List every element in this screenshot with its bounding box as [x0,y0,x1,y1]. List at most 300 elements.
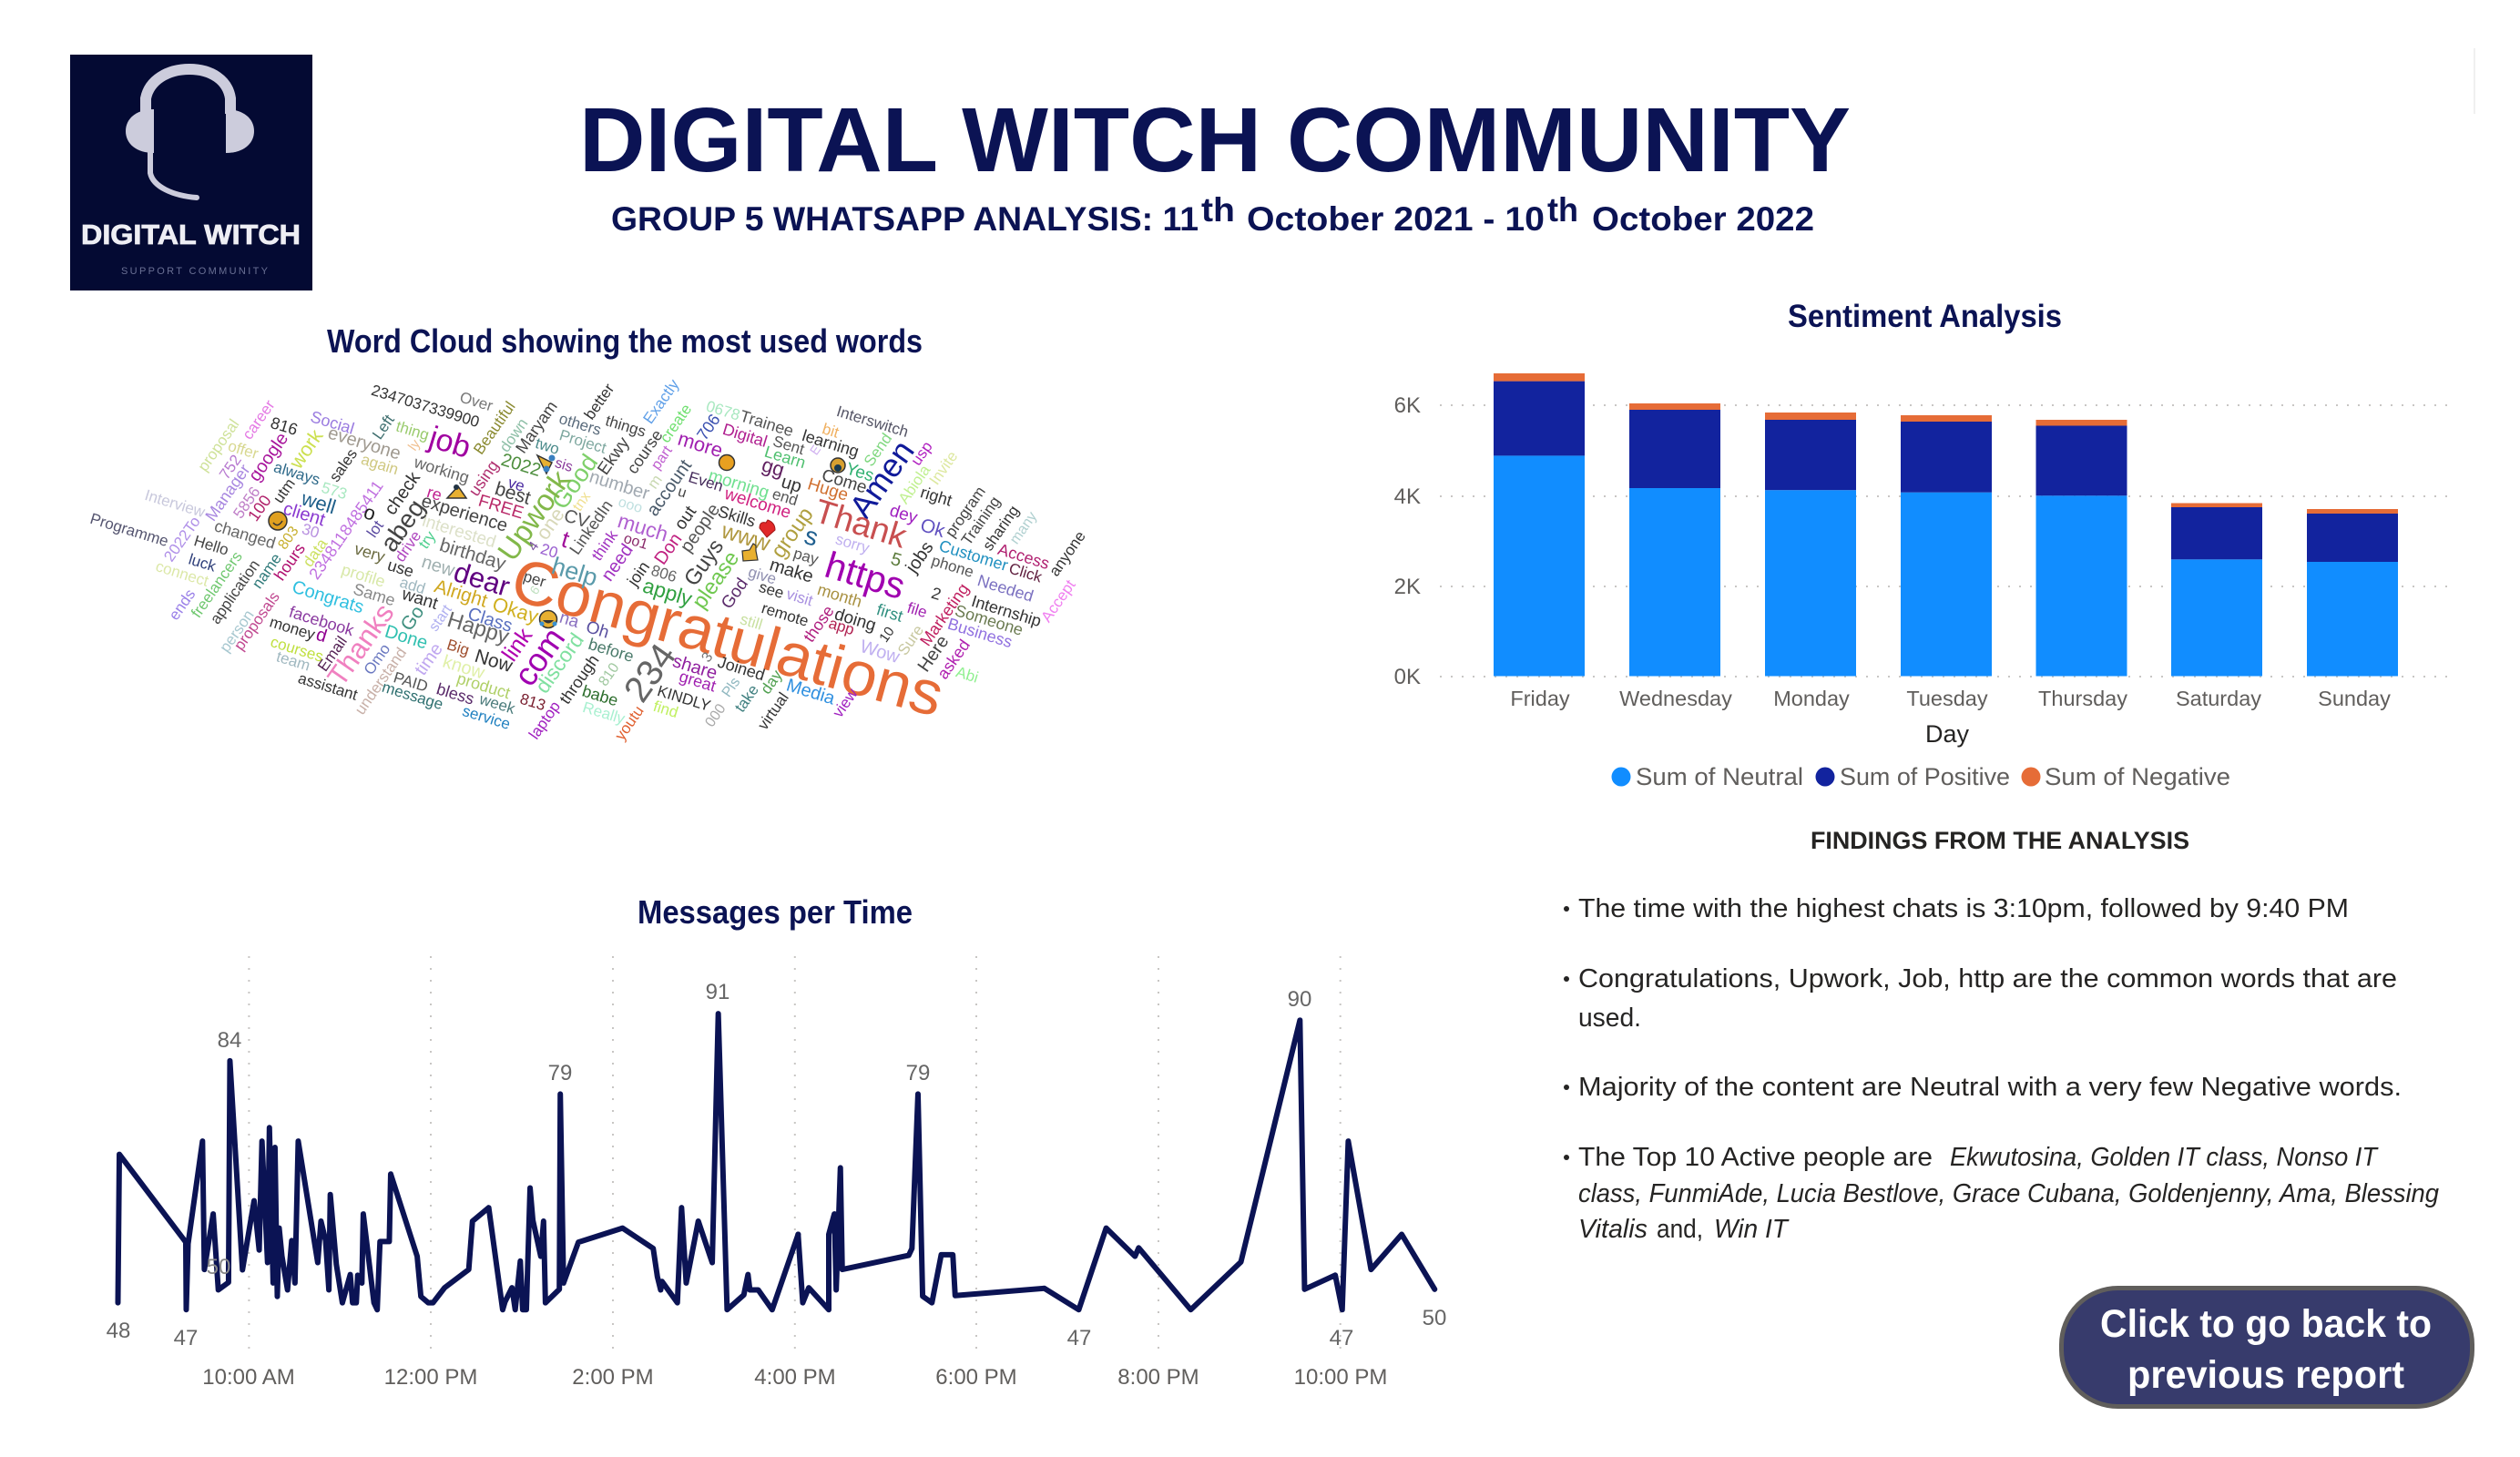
word cloud: need [597,540,638,586]
word cloud: Learn [762,443,808,472]
word cloud: 4 [525,539,542,554]
finding: common words [1564,964,2397,1033]
word cloud: 573 [320,479,349,503]
word cloud: 0678 [704,397,742,424]
word cloud: course [623,426,667,477]
word cloud: people [677,500,724,556]
word cloud: Omo [361,640,393,678]
word cloud: Email [314,633,351,675]
word cloud: Left [369,412,398,443]
data labels: 50 [207,1255,230,1279]
word cloud: bit [821,420,842,442]
word cloud: God [718,575,752,613]
word cloud: gg [760,453,787,482]
word cloud: na [557,608,582,632]
word cloud: 810 [596,660,623,689]
word cloud: Come [820,466,869,497]
word cloud: share [670,651,719,684]
word cloud: using [464,457,503,499]
day axis labels: Saturday [2176,687,2261,710]
word cloud: Programme [88,510,170,550]
word cloud: dey [887,501,920,528]
icon: laughing emoji [539,610,557,628]
bar: Saturday [2171,503,2262,676]
word cloud: Class [465,604,515,637]
word cloud: Maryam [512,398,561,456]
word cloud: 5 [888,549,904,571]
word cloud: 2348118485411 [305,477,387,583]
finding: sentiment majority: Majority of the content are Neutral with a very few Negative words. [1578,1073,2402,1102]
word cloud: many [1007,509,1040,547]
word cloud: o [361,500,379,525]
heading: messages per time: Messages per Time [638,893,913,931]
word cloud: working [411,453,472,487]
word cloud: number [587,467,652,504]
word cloud: Accept [1037,576,1079,626]
word cloud: Skills [716,502,758,531]
word cloud: join [623,558,653,590]
icon: dark emoji [831,458,845,473]
word cloud: apply [640,574,696,611]
word cloud: 10 [876,624,898,646]
data labels: 79 [548,1061,572,1085]
axis title: day: Day [1925,720,1970,748]
word cloud: Yes [843,459,876,486]
word cloud: re [424,483,444,504]
word cloud: through [556,651,603,708]
day axis labels: Thursday [2038,687,2127,710]
word cloud: proposal [195,416,242,474]
word cloud: Abiola [895,462,934,507]
word cloud: profile [340,560,387,591]
button: back to previous report: previous report [2127,1353,2404,1397]
word cloud: visit [784,586,815,609]
word cloud: very [352,539,387,566]
word cloud: group [766,503,819,563]
data labels: 48 [107,1319,130,1343]
word cloud: anyone [1046,528,1089,579]
word cloud: youtu [611,703,648,743]
word cloud: check [381,467,425,519]
word cloud: know [440,652,487,684]
word cloud: facebook [287,603,357,640]
word cloud: 000 [702,701,729,730]
word cloud: assistant [296,669,360,704]
word cloud: s [801,521,821,552]
word cloud: com [506,620,572,693]
word cloud: application [207,556,263,627]
bar: Sunday [2307,509,2398,676]
word cloud: per [521,567,548,591]
word cloud: u [676,484,689,501]
word cloud: 803 [275,524,302,553]
day axis labels: Wednesday [1619,687,1732,710]
word cloud: utm [270,475,299,506]
word cloud: PAID [392,668,430,696]
word cloud: before [587,635,636,666]
icon: heart emoji [760,520,775,537]
word cloud: Internship [969,592,1044,630]
word cloud: view [829,685,862,720]
word cloud [88,376,1089,743]
word cloud: link [497,623,538,666]
word cloud: Marketing [916,580,973,649]
data labels: 84 [218,1028,241,1053]
time axis labels: 8:00 PM [1117,1365,1199,1390]
word cloud: doing [832,605,878,636]
word cloud: babe [580,682,620,709]
word cloud: Abi [954,663,981,687]
word cloud: FREE [476,492,525,523]
word cloud: out [671,503,701,534]
logo: digital witch headset [70,55,312,290]
stacked bar chart: sentiment by day: 0K [1394,665,1421,689]
day axis labels: Tuesday [1906,687,1988,710]
word cloud: data [300,535,332,570]
word cloud: jobs [902,538,938,577]
word cloud: discord [530,628,588,698]
bar: Friday [1494,373,1585,676]
word cloud: Really [581,698,627,728]
data labels: 47 [1067,1326,1091,1350]
word cloud: t [558,525,574,554]
word cloud: use [385,555,416,581]
day axis labels: Friday [1510,687,1570,710]
word cloud: great [677,667,719,696]
finding: top 10 people: and, [1657,1215,1703,1244]
word cloud: account [643,456,696,520]
word cloud: 706 [693,411,724,443]
word cloud: ends [166,586,199,624]
word cloud: Manager [201,461,254,525]
word cloud: Huge [805,474,851,505]
word cloud: d [313,625,330,647]
word cloud: much [615,508,671,546]
word cloud: sis [553,455,575,475]
word cloud: sharing [979,503,1023,554]
subtitle: October 2021 - 10 [1247,200,1545,238]
word cloud: those [800,602,838,646]
word cloud: phone [930,552,975,581]
word cloud: Access [995,540,1052,573]
time axis labels: 10:00 AM [202,1365,295,1390]
word cloud: Happy [444,607,512,649]
word cloud: start [426,602,455,635]
word cloud: message [380,678,445,713]
word cloud: Amen [842,433,922,525]
word cloud: ve [506,474,526,495]
stacked bar chart: sentiment by day: 2K [1394,575,1421,599]
word cloud: product [454,669,513,702]
word cloud: file [905,599,929,621]
day axis labels: Monday [1773,687,1850,710]
word cloud: Joined [716,653,767,684]
data labels: 91 [706,980,729,1004]
word cloud: Exactly [640,376,683,427]
word cloud: two [534,434,561,458]
finding: peak chat times: The time with the highest chats is 3:10pm, followed by 9:40 PM [1578,894,2349,923]
word cloud: Beautiful [470,398,519,458]
word cloud: Social [309,407,356,438]
word cloud: day [757,667,786,698]
word cloud: changed [212,516,278,553]
word cloud: Congrats [290,577,366,617]
word cloud: Good [546,449,603,515]
icon: thumbs up emoji [742,544,758,561]
word cloud: ly [405,436,423,453]
word cloud: 2022 [499,450,543,481]
word cloud: learning [800,426,862,461]
word cloud: 3 [699,649,717,666]
word cloud: 752 [216,452,245,483]
data labels: 47 [1330,1326,1353,1350]
word cloud: Customer [937,536,1010,575]
word cloud: bless [434,679,476,708]
word cloud: 2347037339900 [369,382,482,431]
findings list [1564,894,2439,1244]
bar: Tuesday [1901,415,1992,676]
heading: word cloud: Word Cloud showing the most used words [327,322,923,360]
finding: common words: used. [1578,1004,1641,1033]
word cloud: things [604,412,648,441]
word cloud: 806 [649,562,678,586]
word cloud: always [271,458,322,489]
word cloud: proposals [230,588,283,654]
title: DIGITAL WITCH COMMUNITY [579,89,1851,191]
word cloud: laptop [525,698,564,742]
word cloud: job [424,420,474,465]
word cloud: try [415,527,439,552]
word cloud: career [239,397,279,443]
word cloud: remote [760,599,811,630]
word cloud: 813 [518,690,547,714]
icon: fist emoji [719,455,734,470]
legend: Sum of Negative [2045,763,2230,790]
word cloud: add [398,574,427,597]
word cloud: 100 [244,492,275,525]
word cloud: sorry [833,530,872,557]
legend [1612,763,2230,790]
line series [117,1014,1434,1309]
word cloud: work [284,424,328,474]
word cloud: lot [363,517,387,541]
word cloud: LinkedIn [566,496,617,558]
word cloud: offer [226,437,260,463]
word cloud: see [757,578,786,602]
data labels: 47 [174,1326,198,1350]
word cloud: Someone [953,601,1025,639]
word cloud: courses [269,633,325,666]
word cloud: Sent [770,433,807,458]
word cloud: Interswitch [834,402,911,441]
word cloud: sales [326,445,361,485]
word cloud: Ekwy [594,433,634,479]
word cloud: well [298,486,339,518]
logo: digital witch headset: SUPPORT COMMUNITY [121,266,269,277]
legend: Sum of Neutral [1636,763,1803,790]
time axis labels: 4:00 PM [754,1365,836,1390]
stacked bar chart: sentiment by day [1394,373,2455,748]
finding: top 10 people: Vitalis [1578,1215,1648,1244]
word cloud: ooo [617,494,644,516]
bar: Wednesday [1629,403,1720,676]
time axis labels: 10:00 PM [1294,1365,1387,1390]
word cloud: right [918,483,954,510]
finding: top 10 people: The Top 10 Active people are [1578,1143,1933,1172]
word cloud: app [827,615,856,638]
word cloud: Training [958,494,1004,548]
word cloud: Send [861,430,895,470]
word cloud: hours [270,540,309,584]
word cloud: money [268,613,318,644]
data labels: 50 [1423,1306,1446,1330]
word cloud: luck [187,550,219,576]
word cloud: new [419,552,457,581]
word cloud: make [767,555,816,587]
word cloud: again [359,451,401,478]
finding: top 10 people [1564,1143,2439,1244]
word cloud: 816 [269,413,300,439]
word cloud: create [657,401,695,446]
finding: top 10 people: class, FunmiAde, Lucia Bestlove, Grace Cubana, Goldenjenny, Ama, Blessing [1578,1179,2439,1208]
legend: Sum of Positive [1840,763,2010,790]
word cloud: CV [561,505,592,533]
word cloud: first [874,600,905,626]
word cloud: interested [420,512,498,552]
bar: Monday [1765,413,1856,676]
word cloud: still [738,610,765,634]
word cloud: abeg [374,494,431,556]
word cloud: Guys [679,535,729,591]
word cloud: dear [450,555,514,603]
heading: sentiment analysis: Sentiment Analysis [1788,299,2062,334]
word cloud: down [496,415,531,455]
word cloud: Wow [858,637,903,667]
word cloud: one [531,504,569,544]
word cloud: welcome [721,484,793,523]
word cloud: asked [934,637,974,682]
subtitle: th [1547,191,1578,229]
word cloud: team [274,647,312,675]
word cloud: person [216,606,258,656]
word cloud: better [581,380,617,423]
word cloud: time [411,639,447,679]
word cloud: thing [394,418,431,443]
word cloud: Invite [926,448,961,488]
word cloud: tnx [570,489,594,515]
word cloud: Hello [192,532,230,559]
time axis labels: 6:00 PM [935,1365,1017,1390]
word cloud: others [557,410,603,439]
word cloud: Upwork [491,464,577,566]
word cloud: Click [1007,560,1045,586]
word cloud: best [493,478,533,509]
word cloud: connect [154,557,211,590]
word cloud: part [648,443,676,473]
data labels [107,980,1446,1350]
word cloud: give [746,563,779,588]
finding: top 10 people: Win IT [1714,1215,1790,1244]
stacked bar chart: sentiment by day: 6K [1394,393,1421,418]
stacked bar chart: sentiment by day: 4K [1394,484,1421,509]
word cloud: 5856 [230,484,264,522]
word cloud: please [688,546,744,614]
word cloud: 2 [929,584,944,604]
bar: Thursday [2036,420,2127,676]
word cloud: https [821,544,910,607]
word cloud: everyone [325,423,403,464]
word cloud: oo1 [622,531,649,553]
word cloud: Trainee [738,407,796,440]
time axis labels: 2:00 PM [572,1365,654,1390]
button: back to previous report [2062,1288,2472,1406]
subtitle: October 2022 [1592,200,1814,238]
word cloud: program [942,484,989,540]
word cloud: Okay [490,593,541,627]
word cloud: Ok [918,515,948,542]
time axis labels: 12:00 PM [384,1365,477,1390]
word cloud: Alright [432,576,490,612]
word cloud: freelancers [188,548,246,621]
word cloud: help [548,552,601,592]
day axis labels: Sunday [2318,687,2391,710]
heading: findings: FINDINGS FROM THE ANALYSIS [1811,827,2189,854]
icon: party popper emoji [447,484,466,498]
word cloud: morning [706,466,771,503]
time axis labels [202,1365,1387,1390]
word cloud: drive [392,527,424,565]
word cloud: up [779,472,804,497]
word cloud: end [770,485,800,509]
finding: common words: Congratulations, Upwork, Job, http are the common words that are [1578,964,2397,993]
word cloud: Sure [894,622,927,658]
word cloud: Digital [720,420,770,451]
word cloud: Same [352,580,397,609]
word cloud: understand [352,645,410,718]
logo: digital witch headset: DIGITAL WITCH [81,219,301,250]
data labels: 90 [1288,987,1311,1012]
word cloud: www [718,517,774,557]
word cloud: experience [419,491,510,536]
word cloud: google [245,429,292,485]
word cloud: want [399,585,441,614]
word cloud: Now [473,646,515,677]
word cloud: 20 [538,540,560,562]
word cloud: Pls [719,675,743,700]
data labels: 79 [906,1061,930,1085]
finding: top 10 people: Ekwutosina, Golden IT class, Nonso IT [1950,1143,2379,1172]
word cloud: Congratulations [505,545,951,730]
word cloud: Thanks [321,597,400,692]
word cloud: Interview [143,486,208,521]
word cloud: Business [945,615,1015,651]
word cloud: week [476,690,517,718]
word cloud: service [460,702,513,733]
word cloud: birthday [437,535,509,575]
word cloud: take [731,681,762,716]
word cloud: 6 [526,583,543,597]
word cloud: month [815,580,864,611]
word cloud: Here [914,632,953,676]
word cloud: KINDLY [655,682,713,715]
word cloud: Go [397,602,428,635]
word cloud: think [588,526,621,564]
word cloud: virtual [754,689,792,733]
word cloud: Even [687,468,725,495]
word cloud: m [644,472,666,492]
day axis labels [1510,687,2391,710]
word cloud: pay [791,545,821,568]
